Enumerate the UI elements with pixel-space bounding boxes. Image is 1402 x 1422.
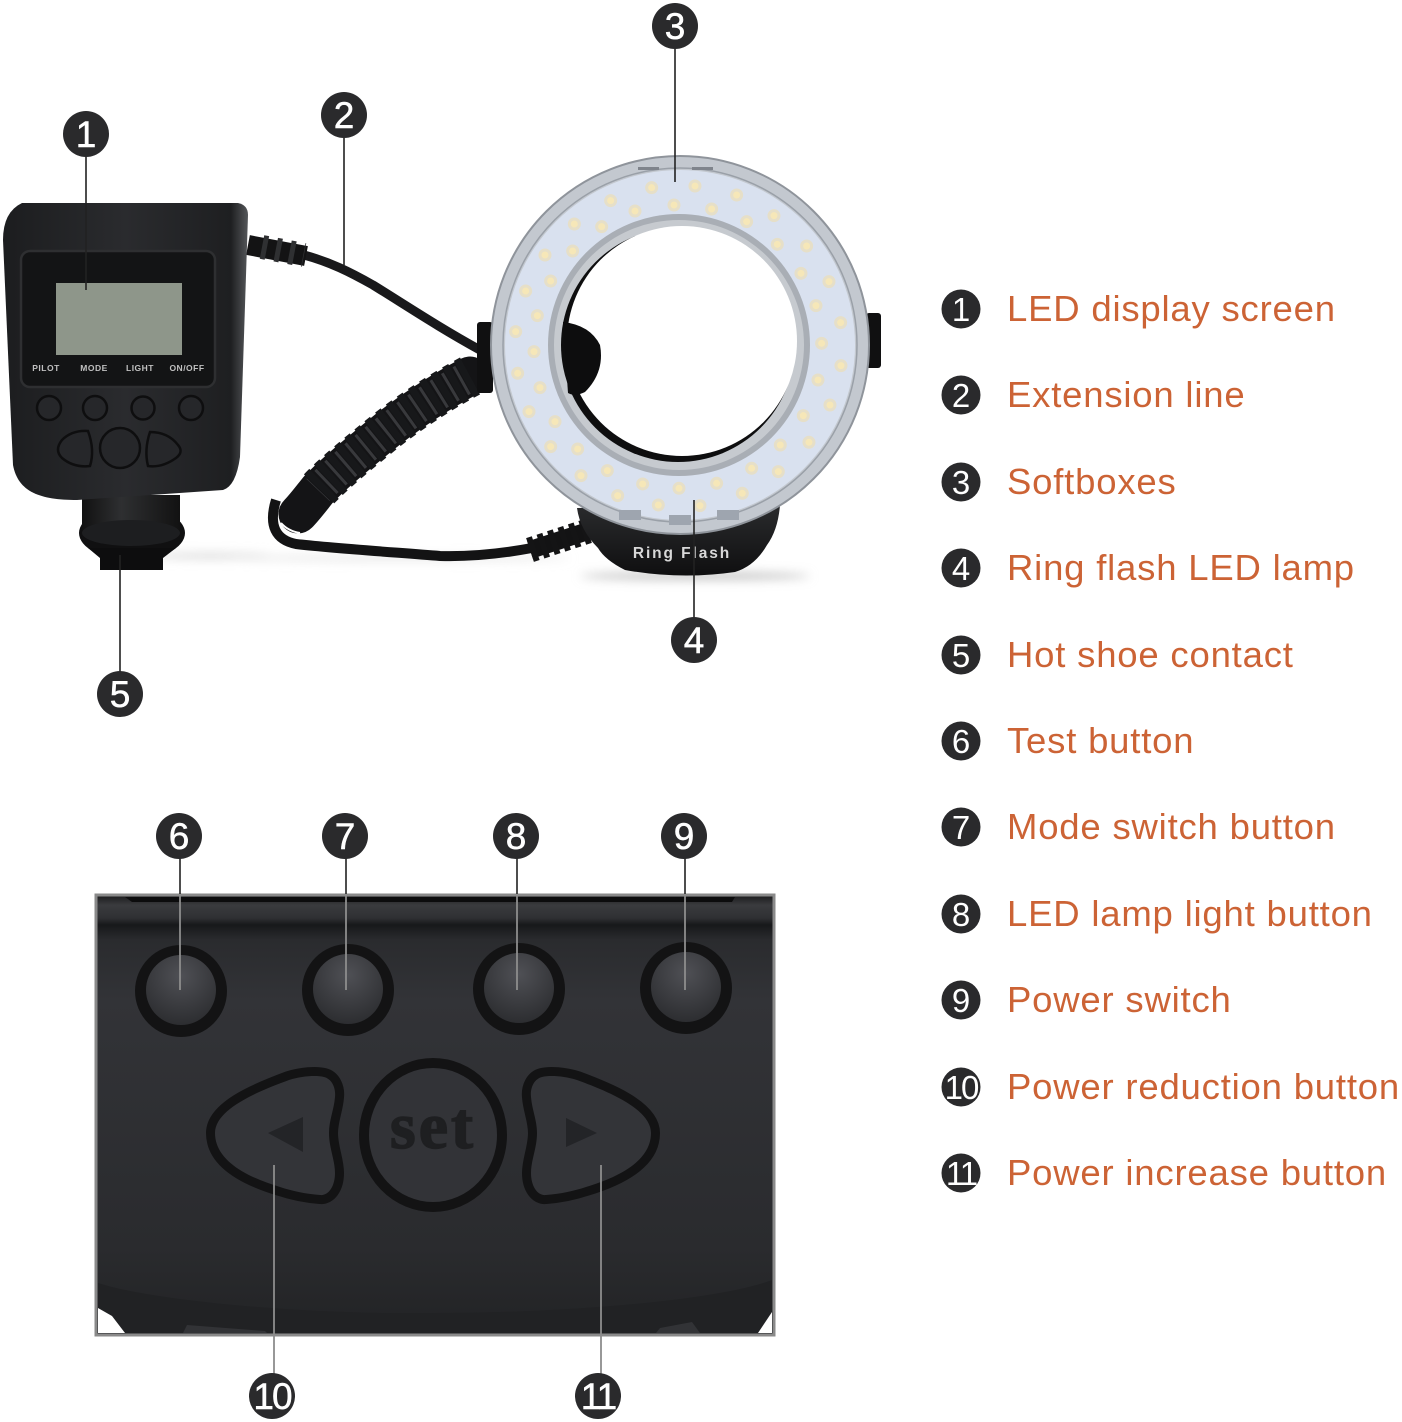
legend item 4: 4	[952, 550, 970, 587]
callout 11: 11	[581, 1376, 616, 1417]
ring base	[577, 505, 780, 576]
ring flash label: Ring Flash	[633, 545, 731, 562]
legend item 7: Mode switch button	[1007, 806, 1336, 847]
callout 4: 4	[684, 620, 704, 661]
softbox tabs	[619, 167, 739, 525]
power increase button	[531, 1076, 651, 1195]
callout 2: 2	[334, 95, 354, 136]
lens opening	[561, 226, 797, 462]
hot shoe foot	[79, 495, 185, 570]
unit body	[3, 203, 248, 500]
legend item 9: 9	[952, 982, 970, 1019]
callout 3: 3	[665, 6, 685, 47]
legend item 2: Extension line	[1007, 374, 1245, 415]
legend item 2: 2	[952, 377, 970, 414]
callout 5: 5	[110, 674, 130, 715]
button labels	[32, 363, 205, 373]
legend item 3: 3	[952, 464, 970, 501]
callout 4	[671, 500, 717, 663]
bottom tabs	[183, 1322, 700, 1333]
callout 9: 9	[674, 816, 694, 857]
callout 3	[652, 3, 698, 182]
coiled cord	[281, 376, 470, 533]
callout 6	[156, 813, 202, 990]
legend item 7: 7	[952, 809, 970, 846]
callout 6: 6	[169, 816, 189, 857]
screen bezel	[21, 251, 215, 387]
top edge strip	[125, 897, 735, 902]
button labels: LIGHT	[126, 363, 154, 373]
ring flash	[477, 156, 881, 576]
button labels: PILOT	[32, 363, 60, 373]
legend item 4: Ring flash LED lamp	[1007, 547, 1355, 588]
legend item 10: Power reduction button	[1007, 1066, 1400, 1107]
extension cable from control unit to ring	[248, 245, 588, 556]
callout 1: 1	[76, 114, 96, 155]
legend item 11: 11	[946, 1155, 977, 1192]
small round buttons	[135, 942, 732, 1037]
softbox rim line	[503, 168, 857, 522]
callout 7	[322, 813, 368, 990]
diffuser panel	[505, 170, 855, 520]
callout 1	[63, 111, 109, 290]
callout 2	[321, 92, 367, 265]
callout 11	[575, 1165, 621, 1419]
legend	[942, 288, 1400, 1193]
legend item 10: 10	[945, 1069, 979, 1106]
LED lamps	[511, 181, 846, 511]
legend item 9: Power switch	[1007, 979, 1232, 1020]
panel body	[96, 895, 774, 1335]
unit buttons	[37, 396, 203, 468]
side tabs	[477, 322, 493, 393]
button labels: ON/OFF	[169, 363, 205, 373]
callout 5	[97, 555, 143, 717]
product photo: shadows under flash	[150, 553, 810, 580]
button close-up panel	[96, 895, 774, 1335]
callout 9	[661, 813, 707, 990]
control unit	[3, 203, 248, 570]
bottom white corners	[98, 1308, 772, 1333]
legend item 5: Hot shoe contact	[1007, 634, 1294, 675]
callout 8: 8	[506, 816, 526, 857]
LCD display	[56, 283, 182, 355]
legend item 8: LED lamp light button	[1007, 893, 1373, 934]
button labels: MODE	[80, 363, 108, 373]
legend item 11: Power increase button	[1007, 1152, 1387, 1193]
outer softbox	[491, 156, 869, 534]
legend item 6: 6	[952, 723, 970, 760]
legend item 6: Test button	[1007, 720, 1194, 761]
set button: set	[390, 1090, 476, 1163]
legend item 1: 1	[952, 291, 970, 328]
legend item 8: 8	[952, 896, 970, 933]
legend item 1: LED display screen	[1007, 288, 1336, 329]
legend item 5: 5	[952, 637, 970, 674]
legend item 3: Softboxes	[1007, 461, 1177, 502]
callout 8	[493, 813, 539, 990]
set button	[369, 1068, 497, 1202]
callout 7: 7	[335, 816, 355, 857]
callout 10	[249, 1165, 295, 1419]
bottom curved shade	[98, 1280, 772, 1333]
inner ring	[548, 214, 810, 476]
callout 10: 10	[253, 1376, 292, 1417]
power reduction button	[215, 1076, 335, 1195]
